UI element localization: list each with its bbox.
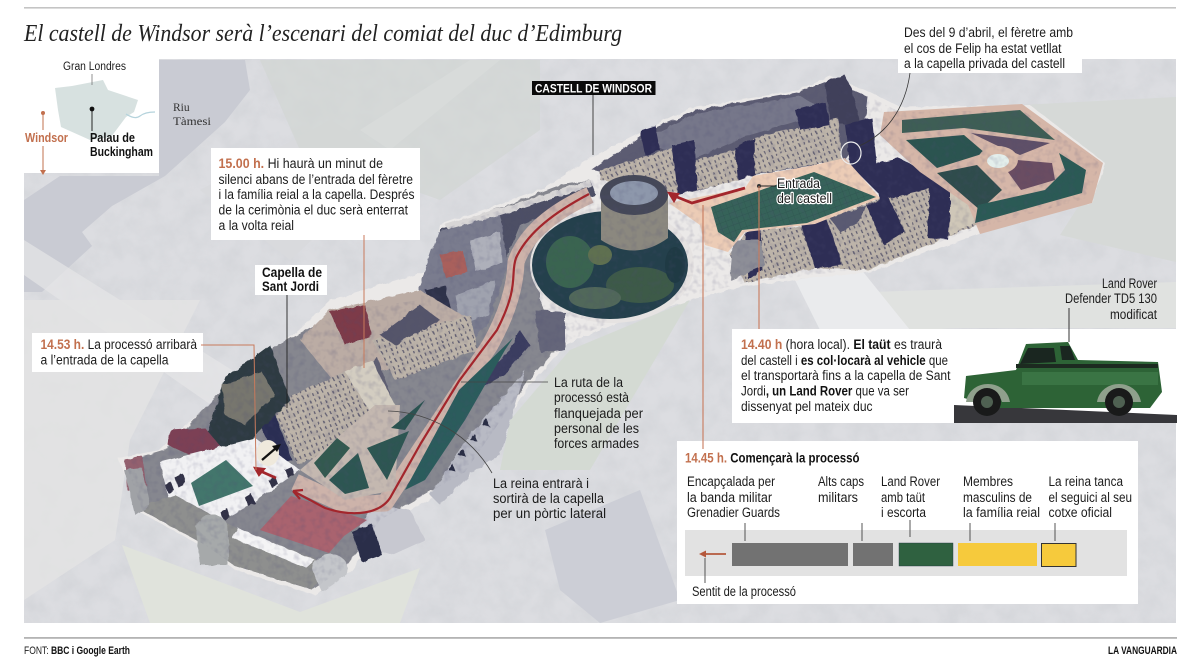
callout: 15.00 h: [211, 148, 420, 368]
column label: queen: el seguici al seu: [1048, 490, 1132, 505]
label: Riu Tamesi: Riu: [173, 102, 190, 114]
river Thames: [24, 60, 250, 292]
body stripe: [1016, 364, 1158, 368]
top rule: [24, 7, 1176, 9]
north range roofs: [640, 96, 828, 160]
panel heading: 14.45 h. Començarà la processó: [685, 450, 860, 466]
label: Castell de Windsor: [532, 81, 656, 155]
column label: band: la banda militar: [687, 490, 772, 505]
label: Land Rover model: modificat: [1110, 307, 1157, 322]
white buildings: [160, 438, 300, 519]
label: Riu Tamesi: [173, 102, 211, 128]
direction arrow: [699, 550, 726, 583]
column label: royal family: Membres: [963, 474, 1013, 489]
fine photo grain over castle: [128, 90, 1099, 589]
chapel: [276, 374, 370, 464]
note: queen: per un pòrtic lateral: [493, 506, 606, 521]
callout: 14.53 h: a l’entrada de la capella: [40, 352, 169, 368]
callout: 14.53 h: [32, 333, 256, 470]
note: route: flanquejada per: [554, 406, 643, 421]
trees and shadowed yard: [208, 346, 290, 447]
south wall: [143, 495, 312, 590]
callout: 14.40 h: del castell i es col·locarà al vehicle que: [741, 353, 948, 368]
column label: band: Encapçalada per: [687, 474, 775, 489]
east wing: [950, 190, 975, 235]
label: Castell de Windsor: CASTELL DE WINDSOR: [535, 82, 652, 96]
note: private chapel: Des del 9 d’abril, el fèretre amb: [904, 25, 1073, 40]
callout: 14.40 h: [732, 186, 956, 423]
note: route: personal de les: [554, 421, 639, 436]
column label: queen: La reina tanca: [1048, 474, 1123, 489]
procession strip: [685, 530, 1127, 576]
note: queen: sortirà de la capella: [493, 491, 604, 506]
label: Capella de Sant Jordi: Sant Jordi: [262, 278, 319, 294]
wheels: [973, 388, 1001, 416]
label: castle entrance: del castell: [777, 191, 832, 206]
east garden beds: [902, 110, 1086, 223]
north wall of middle ward: [440, 180, 596, 258]
callout: 14.40 h: el transportarà fins a la capella de Sant: [741, 368, 951, 383]
column label: royal family: la família reial: [963, 505, 1040, 520]
column label: military chiefs: Alts caps: [818, 474, 864, 489]
bottom rule: [24, 637, 1177, 639]
parade ground: [260, 496, 367, 553]
side windows: [1020, 346, 1075, 364]
label: castle entrance: [757, 176, 832, 206]
photo: Land Rover Defender: [954, 329, 1177, 423]
Thames line: [126, 112, 155, 118]
callout: 14.40 h: 14.40 h (hora local). El taüt es traurà: [741, 337, 942, 352]
column label: queen: cotxe oficial: [1048, 505, 1112, 520]
label: Land Rover model: Land Rover: [1102, 276, 1157, 291]
north range facade windows: [600, 118, 842, 192]
note: route: [461, 375, 643, 451]
lower ward lawns: [191, 338, 513, 506]
note: queen: [388, 411, 606, 521]
callout: 15.00 h: i la família reial a la capella. Després: [218, 187, 415, 202]
ticks: [745, 520, 1055, 541]
label: Land Rover model: [1065, 276, 1157, 342]
chapel entrance marker: [257, 440, 281, 466]
upper ward courtyard paving: [669, 158, 880, 252]
note: route: forces armades: [554, 436, 639, 451]
label: Capella de Sant Jordi: [255, 264, 327, 408]
white strip: [232, 528, 315, 568]
note: queen: La reina entrarà i: [493, 476, 589, 491]
callout: 15.00 h: de la cerimònia el duc serà enterrat: [218, 202, 408, 218]
south range: [730, 185, 978, 283]
note: private chapel: [841, 25, 1082, 164]
north range dark sides: [640, 102, 880, 195]
brand: LA VANGUARDIA: [1108, 645, 1177, 657]
lower ward base: [125, 180, 590, 590]
label: Land Rover model: Defender TD5 130: [1065, 291, 1157, 306]
towers: [196, 514, 228, 565]
column label: Land Rover: amb taüt: [881, 490, 925, 505]
column label: royal family: masculins de: [963, 490, 1032, 505]
callout: 14.53 h: 14.53 h. La processó arribarà: [40, 337, 197, 352]
central mound garden: [530, 238, 669, 322]
label: Riu Tamesi: Tàmesi: [173, 116, 211, 128]
Buckingham marker: [90, 107, 94, 111]
Windsor label: Windsor: [25, 131, 68, 145]
callout: 14.40 h: Jordi, un Land Rover que va ser: [741, 384, 909, 398]
vehicle body: [964, 342, 1162, 408]
ground: [954, 405, 1177, 423]
inset: Greater London locator: [24, 59, 159, 175]
column label: Land Rover: [881, 474, 940, 520]
castle building mass: [118, 75, 1105, 595]
east garden terrace: [880, 104, 1103, 234]
road to the upper ward: [295, 195, 590, 505]
column label: band: Grenadier Guards: [687, 505, 780, 520]
column label: royal family: [963, 474, 1040, 520]
title: El castell de Windsor serà l’escenari del comiat del duc d’Edimburg: [23, 20, 622, 47]
round tower: [600, 175, 668, 251]
Palau de Buckingham label: Palau de: [90, 131, 135, 145]
lower ward roofs: [415, 215, 508, 345]
procession route: [255, 188, 745, 513]
Greater London shape: [55, 80, 138, 140]
callout: 15.00 h: 15.00 h. Hi haurà un minut de: [218, 156, 383, 171]
inset: Greater London locator: Buckingham: [90, 145, 153, 159]
note: route: La ruta de la: [554, 375, 623, 390]
callout: 14.40 h: dissenyat pel mateix duc: [741, 399, 873, 414]
note: route: processó està: [554, 390, 629, 405]
label: castle entrance: Entrada: [777, 176, 820, 191]
column label: Land Rover: i escorta: [881, 505, 926, 520]
upper ward courtyard lawn: [711, 172, 876, 242]
white halo: [118, 76, 1105, 595]
direction label: Sentit de la processó: [692, 584, 796, 599]
callout: 15.00 h: a la volta reial: [218, 218, 294, 233]
note: private chapel: el cos de Felip ha estat vetllat: [904, 41, 1062, 56]
column label: band: [687, 474, 780, 520]
column label: military chiefs: [818, 474, 864, 505]
column label: military chiefs: militars: [818, 490, 858, 505]
label: Capella de Sant Jordi: Capella de: [262, 264, 322, 280]
north range upper ward: [592, 80, 868, 192]
leader from 14.45: [702, 205, 704, 449]
east side buildings: [400, 330, 530, 490]
source: FONT: BBC i Google Earth: [24, 645, 130, 657]
bars: [732, 543, 1076, 566]
Gran Londres label: Gran Londres: [63, 61, 126, 73]
note: private chapel: a la capella privada del castell: [904, 56, 1065, 71]
south range dark towers: [745, 158, 952, 280]
callout: 15.00 h: silenci abans de l’entrada del fèretre: [218, 172, 413, 187]
column label: queen: [1048, 474, 1132, 520]
panel: procession order: [677, 205, 1138, 604]
Windsor marker: [41, 111, 45, 115]
column label: Land Rover: Land Rover: [881, 474, 940, 489]
wheel arches: [966, 384, 1010, 402]
